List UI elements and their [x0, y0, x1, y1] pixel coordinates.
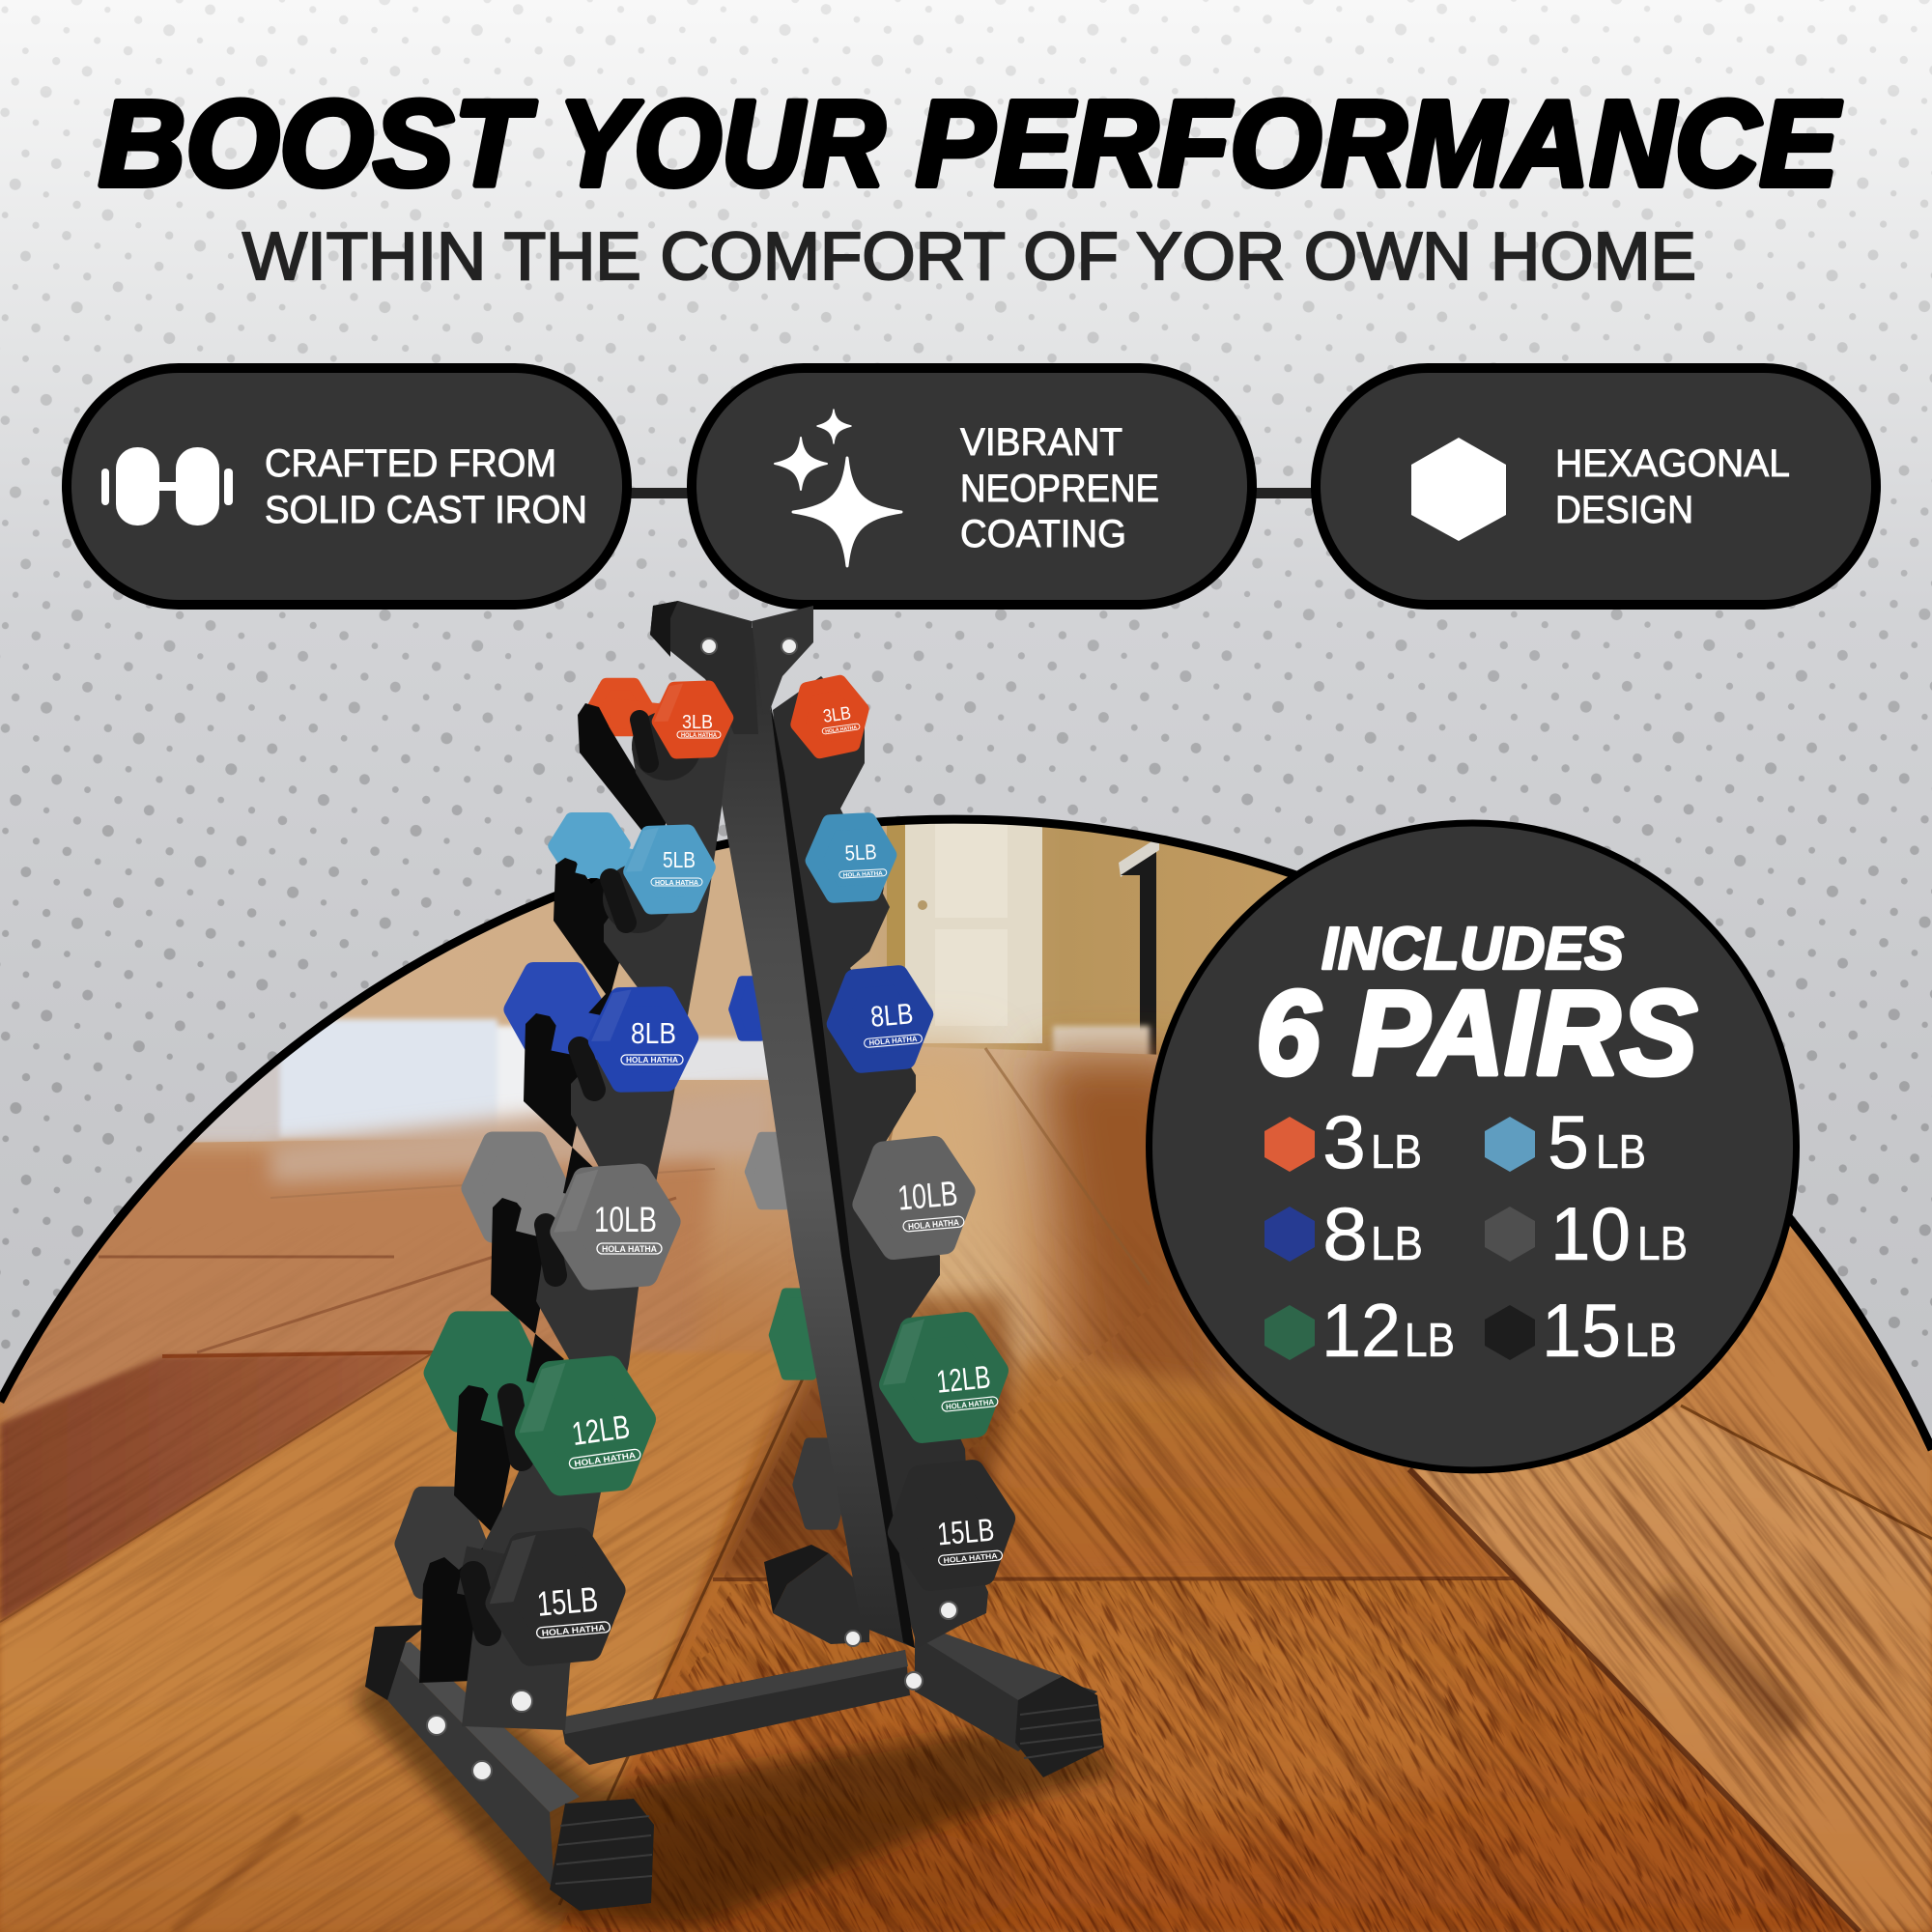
legend: colour hexagons	[1264, 1117, 1535, 1360]
title: YOUR	[558, 75, 885, 212]
dumbbell 10LB left	[550, 1170, 672, 1280]
wood grain	[0, 1254, 1932, 1932]
left rear heads	[403, 684, 647, 1590]
dumbbell 3LB left: 3LB	[682, 712, 713, 733]
arc outline	[0, 819, 1932, 1450]
dark plank	[0, 1352, 434, 1622]
back wall	[193, 825, 1289, 1142]
dumbbell 15LB right: HOLA HATHA	[943, 1551, 998, 1565]
dumbbell 10LB right	[859, 1145, 969, 1251]
baseboards	[174, 1019, 1150, 1145]
door	[887, 811, 1042, 1053]
dumbbell 8LB right	[833, 973, 927, 1065]
dumbbell 8LB left: 8LB	[631, 1016, 676, 1050]
badge big heading: 6 PAIRS	[1256, 967, 1697, 1100]
dumbbell rack product	[353, 601, 1121, 1927]
dumbbell 10LB right: HOLA HATHA	[908, 1217, 960, 1232]
right front plate	[773, 676, 988, 1648]
photo area: room with wooden floor inside arc	[0, 773, 1932, 1932]
middle lit plank	[987, 1347, 1344, 1499]
legend: weights: LB	[1625, 1315, 1677, 1367]
dumbbell 8LB right: 8LB	[869, 998, 915, 1034]
icon: sparkles	[775, 410, 901, 566]
legend: weights: 8	[1322, 1191, 1368, 1276]
dumbbell 3LB right: HOLA HATHA	[825, 724, 858, 735]
hooks and cradles	[603, 701, 884, 933]
rubber caps	[365, 1625, 427, 1700]
dumbbell 15LB left: 15LB	[535, 1579, 600, 1624]
text: vibrant: NEOPRENE	[960, 468, 1159, 510]
legend: weights: 12	[1321, 1288, 1401, 1373]
legend: weights: 10	[1550, 1191, 1631, 1276]
text: hexagonal	[1555, 442, 1790, 531]
dumbbell 12LB left: 12LB	[570, 1408, 632, 1453]
text: crafted: CRAFTED FROM	[265, 442, 556, 485]
legend: weights: LB	[1637, 1218, 1688, 1270]
pill: cast iron	[67, 368, 627, 605]
floor shadow	[353, 1642, 1121, 1927]
text: vibrant	[960, 421, 1159, 555]
grey rear plate	[462, 688, 739, 1730]
dumbbell 3LB right	[791, 679, 868, 754]
dumbbell 5LB right: 5LB	[844, 839, 877, 866]
dumbbell 12LB left	[513, 1363, 648, 1486]
dumbbell 15LB left	[484, 1535, 618, 1656]
dumbbell 8LB left: HOLA HATHA	[626, 1056, 678, 1065]
dumbbell 3LB left: HOLA HATHA	[681, 733, 718, 739]
dumbbell 15LB right	[894, 1468, 1009, 1582]
dumbbell 12LB right: HOLA HATHA	[946, 1398, 995, 1411]
dumbbell 10LB left: 10LB	[594, 1200, 657, 1239]
text: vibrant: VIBRANT	[960, 421, 1122, 464]
dumbbell 5LB left	[624, 828, 709, 907]
dumbbell 3LB right: 3LB	[822, 703, 852, 727]
handles	[462, 713, 676, 1584]
icon: dumbbell	[101, 447, 233, 526]
legend: weights: LB	[1371, 1126, 1422, 1179]
text: crafted	[265, 442, 587, 531]
rack bolts	[427, 639, 957, 1780]
dumbbell 5LB right	[811, 820, 891, 895]
top bracket	[650, 601, 813, 734]
badge: includes 6 pairs	[1150, 823, 1797, 1470]
front plank	[559, 1578, 1860, 1932]
pill: neoprene	[692, 368, 1252, 605]
dumbbell 15LB right: 15LB	[936, 1511, 996, 1551]
legend: weights: LB	[1405, 1315, 1455, 1367]
text: vibrant: COATING	[960, 513, 1126, 555]
dumbbell 12LB right: 12LB	[934, 1358, 992, 1400]
title: PERFORMANCE	[916, 75, 1842, 212]
dumbbell 5LB left: 5LB	[663, 847, 696, 872]
dumbbell 5LB right: HOLA HATHA	[843, 871, 884, 879]
text: hexagonal: HEXAGONAL	[1555, 442, 1790, 485]
right of rack lit boards	[887, 1018, 1061, 1388]
dumbbell 8LB right: HOLA HATHA	[868, 1035, 918, 1047]
legend: weights: LB	[1596, 1126, 1646, 1179]
legend: weights: 15	[1542, 1288, 1621, 1373]
dumbbell 3LB left	[653, 683, 727, 753]
centre dark plank	[690, 1285, 1023, 1615]
icon: hexagon	[1411, 438, 1506, 541]
legend: weights: LB	[1371, 1218, 1423, 1270]
text: hexagonal: DESIGN	[1555, 489, 1693, 531]
dumbbell 12LB right	[876, 1319, 1003, 1435]
wood floor	[0, 1046, 1932, 1932]
centre post	[722, 628, 915, 1648]
connector lines between pills	[628, 488, 1314, 498]
black rear rail	[419, 703, 667, 1683]
title	[99, 75, 1842, 212]
right plank	[1409, 1406, 1932, 1932]
side table	[1119, 837, 1159, 1063]
legend: weights: 3	[1322, 1099, 1366, 1184]
background with halftone dots	[0, 0, 1932, 1439]
text: crafted: SOLID CAST IRON	[265, 489, 587, 531]
legend: weights	[1321, 1099, 1688, 1373]
legend: weights: 5	[1548, 1099, 1589, 1184]
dumbbell 8LB left	[590, 989, 690, 1083]
dumbbell 10LB right: 10LB	[896, 1173, 959, 1218]
dumbbell 15LB left: HOLA HATHA	[541, 1623, 606, 1638]
far left planks	[0, 1150, 715, 1430]
lower left plank	[0, 1352, 792, 1932]
badge heading: INCLUDES	[1321, 916, 1624, 982]
pill: hexagonal	[1316, 368, 1876, 605]
subtitle: WITHIN THE COMFORT OF YOR OWN HOME	[242, 218, 1696, 294]
dumbbell 5LB left: HOLA HATHA	[655, 880, 698, 887]
dumbbell 10LB left: HOLA HATHA	[602, 1244, 657, 1254]
rack base	[365, 1545, 1104, 1911]
dumbbell 12LB left: HOLA HATHA	[574, 1450, 637, 1468]
plank seam lines	[0, 1048, 1932, 1932]
title: BOOST	[99, 75, 536, 212]
right rear heads (behind post)	[733, 980, 845, 1525]
